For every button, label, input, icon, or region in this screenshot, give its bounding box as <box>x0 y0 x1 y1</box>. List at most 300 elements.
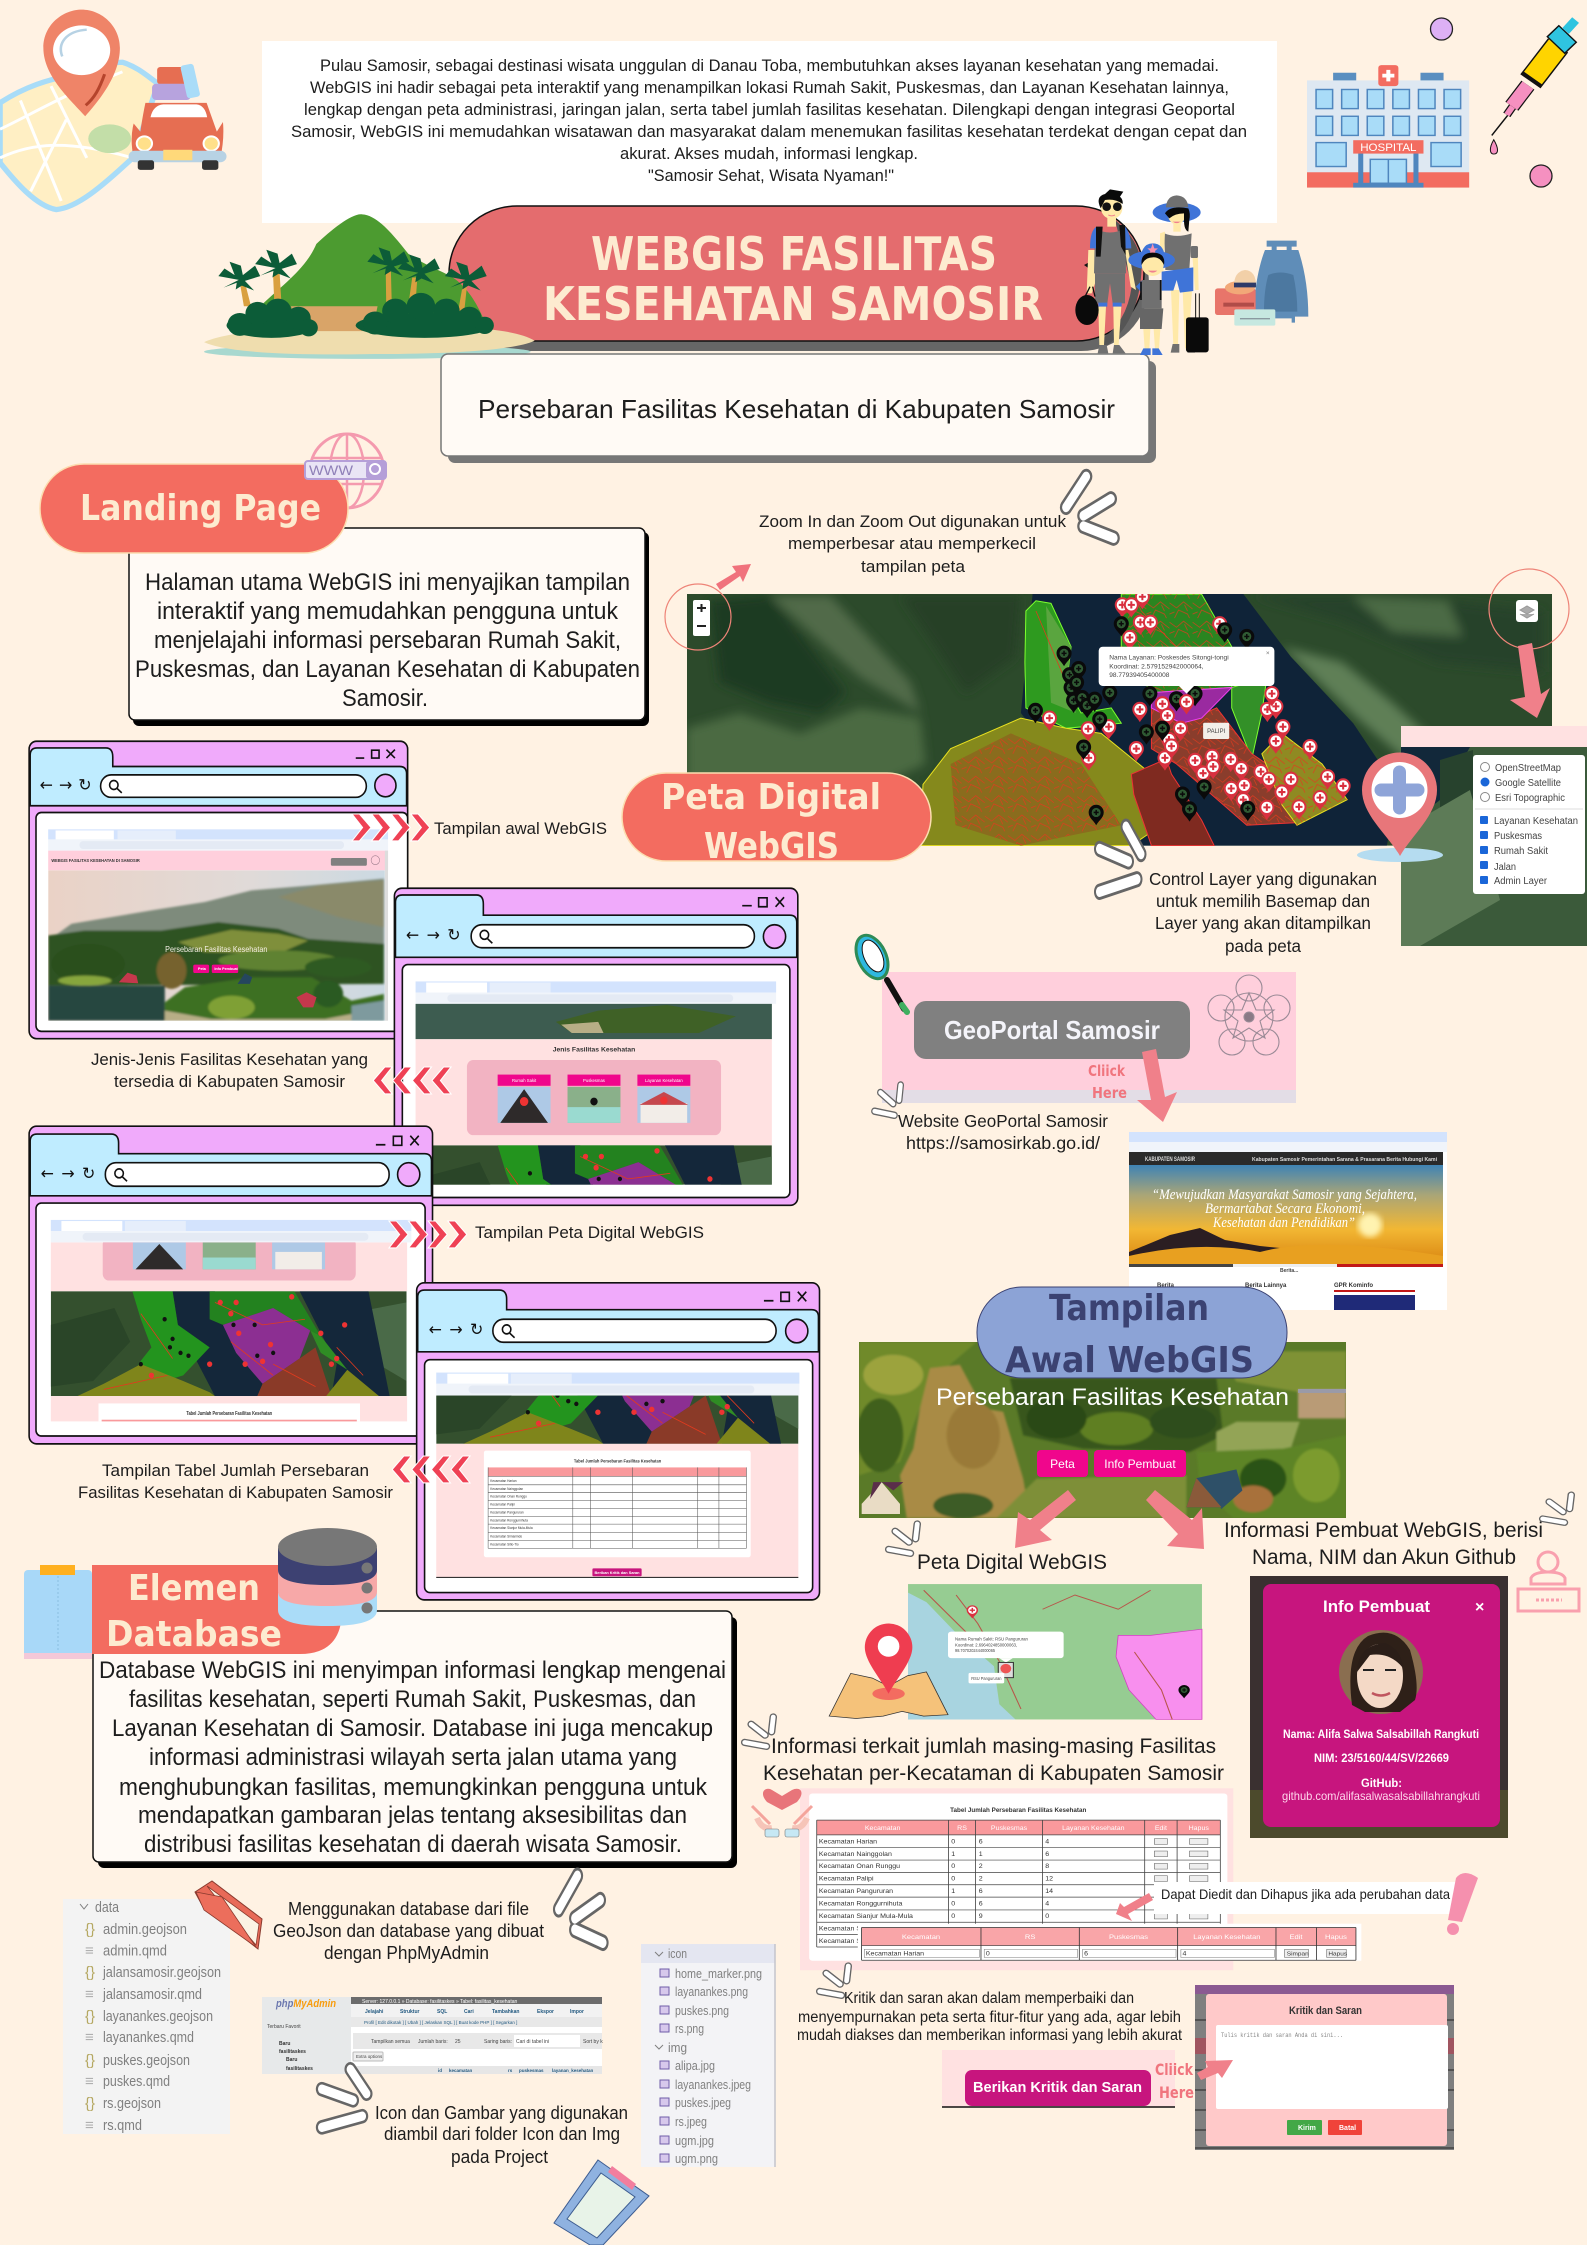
file list: icon and img folders: ugm.jpg <box>675 2133 714 2148</box>
table panel: facility count: Tabel Jumlah Persebaran Fasilitas Kesehatan <box>950 1807 1086 1814</box>
table panel: facility count: Kecamatan Nainggolan <box>819 1851 892 1858</box>
database text box <box>93 1611 737 1868</box>
browser window 4: facility table <box>417 1283 820 1600</box>
screenshot: phpMyAdmin: Impor <box>570 2009 584 2015</box>
file list: data folder: {} <box>85 2052 95 2069</box>
screenshot: phpMyAdmin: Ekspor <box>537 2009 554 2015</box>
control layer caption: untuk memilih Basemap dan <box>1156 891 1370 911</box>
browser window 4: facility table: Tabel Jumlah Persebaran Fasilitas Kesehatan <box>574 1458 662 1463</box>
file list: icon and img folders: ugm.png <box>675 2151 718 2166</box>
browser window 1: landing page: ←→↻ <box>40 775 92 795</box>
browser window 1: landing page: Persebaran Fasilitas Kesehatan <box>165 945 267 954</box>
file list: icon and img folders: rs.png <box>675 2021 704 2036</box>
icon: exclamation mark <box>1447 1873 1478 1935</box>
caption: icon and image folders <box>375 2103 628 2167</box>
file list: icon and img folders: layanankes.jpeg <box>675 2077 751 2092</box>
screenshot: phpMyAdmin: Jelajahi <box>365 2009 384 2015</box>
control layer screenshot: Jalan <box>1494 862 1516 873</box>
table panel: facility count <box>800 1788 1233 1970</box>
database text box: Layanan Kesehatan di Samosir. Database ini juga mencakup <box>112 1715 713 1742</box>
file list: data folder: ≡ <box>85 1986 94 2003</box>
caption: database source: GeoJson dan database yang dibuat <box>273 1921 544 1941</box>
heading pill: Elemen Database: Database <box>106 1614 282 1655</box>
heading pill: Peta Digital WebGIS: WebGIS <box>704 826 839 867</box>
file list: data folder: {} <box>85 1921 95 1938</box>
file list: icon and img folders: puskes.png <box>675 2003 729 2018</box>
screenshot: phpMyAdmin: Profil [ Edit dikotak ] [ Ubah ] [ Jelaskan SQL ] [ Buat kode PHP ] [ Segarkan ] <box>364 2020 517 2025</box>
table panel: facility count: Edit <box>1155 1825 1167 1832</box>
icon: hospital building: HOSPITAL <box>1360 141 1417 154</box>
heading pill: Landing Page <box>40 464 348 553</box>
icon: tropical island <box>204 214 535 359</box>
icon: emphasis strokes near kritik caption <box>820 1966 848 1995</box>
file list: data folder: {} <box>85 2095 95 2112</box>
zoom explanation text: Zoom In dan Zoom Out digunakan untuk <box>759 512 1066 531</box>
file list: data folder: jalansamosir.qmd <box>102 1986 202 2003</box>
click here label <box>1155 2060 1194 2102</box>
icon: emphasis strokes near zoom text <box>1066 476 1114 538</box>
title banner: WEBGIS FASILITAS <box>591 227 997 281</box>
intro text panel: akurat. Akses mudah, informasi lengkap. <box>620 145 918 163</box>
file list: icon and img folders: img <box>668 2040 687 2055</box>
table panel: facility count: Kecamatan Harian <box>819 1839 877 1845</box>
screenshot: phpMyAdmin: Cari di tabel ini <box>516 2039 549 2045</box>
screenshot: kabupaten samosir website: GPR Kominfo <box>1334 1283 1373 1289</box>
control layer caption: pada peta <box>1225 936 1301 956</box>
file list: data folder: admin.geojson <box>103 1921 187 1938</box>
info pembuat modal: GitHub: <box>1361 1776 1402 1790</box>
edit row table overlay <box>858 1924 1361 1961</box>
table panel: facility count: 6 <box>1045 1851 1050 1858</box>
table panel: facility count: 6 <box>979 1888 983 1895</box>
table panel: facility count: 0 <box>951 1876 956 1882</box>
caption: peta digital: Tampilan Peta Digital WebGIS <box>475 1223 704 1242</box>
screenshot: kabupaten samosir website: Berita... <box>1280 1268 1299 1274</box>
heading pill: Landing Page: Landing Page <box>80 488 321 529</box>
caption: peta digital webgis: Peta Digital WebGIS <box>917 1551 1107 1574</box>
info pembuat modal: Info Pembuat <box>1323 1597 1430 1616</box>
file list: data folder: {} <box>85 1964 95 1981</box>
chevrons: first window <box>352 814 430 841</box>
icon: emphasis strokes near control caption <box>1100 827 1141 892</box>
caption: kritik dan saran: Kritik dan saran akan dalam memperbaiki dan <box>844 1990 1134 2007</box>
browser window 4: facility table: Kecamatan Sianjur Mula-Mula <box>490 1526 533 1530</box>
browser window 1: landing page <box>29 741 408 1039</box>
screenshot: phpMyAdmin: Cari <box>464 2009 474 2015</box>
table panel: facility count: 6 <box>979 1839 983 1845</box>
caption: tabel jumlah: Fasilitas Kesehatan di Kabupaten Samosir <box>78 1483 393 1502</box>
geoportal button banner: Cliick <box>1088 1062 1126 1080</box>
decorative circle: pink <box>1530 165 1552 187</box>
icon: open folder <box>195 1881 262 1949</box>
icon: university emblem <box>1208 975 1290 1055</box>
edit row table overlay: 6 <box>1084 1951 1088 1957</box>
edit row table overlay: RS <box>1025 1933 1036 1941</box>
file list: data folder: {} <box>85 2008 95 2025</box>
arrow to geoportal site <box>1137 1049 1177 1122</box>
kritik button panel: Berikan Kritik dan Saran <box>973 2080 1142 2096</box>
edit row table overlay: Edit <box>1289 1933 1302 1941</box>
edit row table overlay: Hapus <box>1325 1933 1347 1941</box>
kritik dan saran modal: Kirim <box>1298 2125 1316 2132</box>
screenshot: kabupaten samosir website: KABUPATEN SAMOSIR <box>1145 1157 1195 1163</box>
browser window 2: facility types: Layanan Kesehatan <box>645 1078 683 1083</box>
table panel: facility count: Layanan Kesehatan <box>1062 1825 1125 1832</box>
caption: tampilan awal: Tampilan awal WebGIS <box>434 819 607 838</box>
caption: jenis fasilitas: tersedia di Kabupaten Samosir <box>114 1072 345 1091</box>
landing page text box: Puskesmas, dan Layanan Kesehatan di Kabupaten <box>135 656 640 683</box>
icon: hands holding heart <box>752 1789 812 1837</box>
kritik dan saran modal: Tulis kritik dan saran Anda di sini... <box>1221 2032 1343 2039</box>
file list: data folder: ≡ <box>85 1942 94 1960</box>
control layer caption <box>1149 869 1377 956</box>
file list: icon and img folders: home_marker.png <box>675 1966 762 1981</box>
icon: hospital building <box>1307 65 1469 188</box>
screenshot: phpMyAdmin: kecamatan <box>449 2068 473 2073</box>
screenshot: phpMyAdmin: SQL <box>437 2009 447 2015</box>
small map screenshot <box>908 1584 1202 1719</box>
table panel: facility count: 8 <box>1045 1863 1050 1870</box>
table panel: facility count: 0 <box>951 1901 956 1908</box>
control layer screenshot: Esri Topographic <box>1495 793 1565 804</box>
screenshot: kabupaten samosir website: “Mewujudkan Masyarakat Samosir yang Sejahtera, <box>1152 1187 1417 1203</box>
info pembuat modal: Nama: Alifa Salwa Salsabillah Rangkuti <box>1283 1727 1479 1741</box>
kritik dan saran modal <box>1195 1985 1454 2150</box>
callout: edit and delete <box>1154 1882 1458 1914</box>
icon: person <box>1518 1552 1579 1611</box>
file list: data folder: rs.qmd <box>103 2117 142 2134</box>
geoportal caption: Website GeoPortal Samosir <box>898 1111 1108 1131</box>
caption: jumlah fasilitas <box>763 1735 1224 1785</box>
screenshot: phpMyAdmin: phpMyAdmin <box>275 1998 336 2010</box>
icon: location pin with cross <box>1357 753 1443 862</box>
screenshot: phpMyAdmin: Terbaru Favorit <box>267 2024 301 2030</box>
landing page text box: Samosir. <box>342 685 428 712</box>
landing page preview photo: Info Pembuat <box>1104 1457 1176 1471</box>
control layer screenshot: Google Satellite <box>1495 778 1561 789</box>
browser window 1: landing page: Peta <box>198 967 207 971</box>
file list: data folder <box>63 1899 230 2134</box>
kritik dan saran modal: Batal <box>1339 2125 1356 2132</box>
control layer screenshot: Layanan Kesehatan <box>1494 816 1578 827</box>
intro text panel: WebGIS ini hadir sebagai peta interaktif yang menampilkan lokasi Rumah Sakit, Puskesmas, dan Layanan Kesehatan lainnya, <box>310 79 1229 97</box>
browser window 4: facility table: Kecamatan Sitio-Tio <box>490 1542 519 1546</box>
intro text panel <box>262 41 1277 223</box>
screenshot: phpMyAdmin: Jumlah baris: <box>418 2039 448 2045</box>
heading pill: Peta Digital WebGIS <box>622 773 931 867</box>
table panel: facility count: Puskesmas <box>991 1825 1028 1832</box>
map zoom control <box>665 584 731 650</box>
icon: www globe <box>310 434 384 508</box>
table panel: facility count: RS <box>957 1825 968 1832</box>
edit row table overlay: Simpan <box>1287 1951 1309 1957</box>
heading pill: Elemen Database <box>92 1565 342 1655</box>
info pembuat modal: NIM: 23/5160/44/SV/22669 <box>1314 1751 1449 1765</box>
file list: data folder: layanankes.qmd <box>103 2029 194 2046</box>
control layer screenshot: OpenStreetMap <box>1495 763 1561 774</box>
small map screenshot: 98.7070202444000065 <box>955 1648 995 1654</box>
file list: icon and img folders: alipa.jpg <box>675 2058 715 2073</box>
icon: emphasis strokes near database source <box>559 1876 603 1943</box>
caption: kritik dan saran: menyempurnakan peta serta fitur-fitur yang ada, agar lebih <box>798 2009 1181 2026</box>
title banner: KESEHATAN SAMOSIR <box>543 277 1043 331</box>
caption: database source <box>273 1899 544 1963</box>
intro text panel: Pulau Samosir, sebagai destinasi wisata unggulan di Danau Toba, membutuhkan akses layanan kesehatan yang memadai. <box>320 57 1219 75</box>
caption: tabel jumlah <box>78 1461 393 1502</box>
table panel: facility count: 1 <box>951 1888 956 1895</box>
table panel: facility count: Kecamatan Sianjur Mula-Mula <box>819 1913 913 1920</box>
icon: emphasis strokes near folder caption <box>322 2069 367 2127</box>
digital map panel: Nama Layanan: Poskesdes Sitongi-tongi <box>1109 654 1229 661</box>
table panel: facility count: Hapus <box>1189 1825 1210 1832</box>
screenshot: phpMyAdmin: fasilitaskes <box>286 2066 313 2072</box>
caption: tabel jumlah: Tampilan Tabel Jumlah Persebaran <box>102 1461 369 1480</box>
digital map panel: × <box>1266 650 1270 657</box>
browser window 3: digital map <box>29 1126 433 1444</box>
icon: map with red pin <box>829 1624 948 1718</box>
map layer button <box>1489 569 1569 649</box>
file list: data folder: data <box>95 1899 120 1916</box>
edit row table overlay: Hapus <box>1328 1951 1347 1957</box>
icon: luggage <box>1215 241 1308 326</box>
browser window 4: facility table: Kecamatan Onan Runggu <box>490 1495 527 1499</box>
table panel: facility count: 2 <box>979 1863 983 1870</box>
screenshot: phpMyAdmin <box>262 1997 603 2074</box>
arrow to layer control <box>1510 643 1550 718</box>
icon: www search bar <box>305 461 386 479</box>
browser window 1: landing page: WEBGIS FASILITAS KESEHATAN DI SAMOSIR <box>51 858 141 863</box>
file list: data folder: ≡ <box>85 2073 94 2090</box>
caption: informasi pembuat <box>1224 1519 1543 1569</box>
browser window 4: facility table: Kecamatan Simanindo <box>490 1534 522 1539</box>
geoportal button banner <box>882 972 1296 1103</box>
screenshot: kabupaten samosir website: Kabupaten Samosir Pemerintahan Sarana & Prasarana Berita Hubungi Kami <box>1252 1157 1438 1163</box>
control layer screenshot: Admin Layer <box>1494 876 1548 887</box>
edit row table overlay: 0 <box>986 1951 990 1957</box>
control layer caption: Layer yang akan ditampilkan <box>1155 913 1371 933</box>
table panel: facility count: 2 <box>979 1876 983 1882</box>
chevrons: third window <box>389 1221 467 1248</box>
table panel: facility count: 4 <box>1045 1901 1050 1908</box>
kritik button panel <box>942 2050 1175 2107</box>
small map screenshot: Koordinat: 2.6964024850000063, <box>955 1643 1017 1648</box>
table panel: facility count: 6 <box>979 1901 983 1908</box>
info pembuat modal <box>1250 1576 1508 1838</box>
browser window 2: facility types: Puskesmas <box>583 1078 606 1083</box>
digital map panel <box>687 589 1555 846</box>
screenshot: phpMyAdmin: rs <box>508 2068 513 2073</box>
arrow to zoom control caption <box>716 564 751 590</box>
browser window 2: facility types: ←→↻ <box>406 925 461 945</box>
caption: jumlah fasilitas: Informasi terkait jumlah masing-masing Fasilitas <box>771 1735 1216 1758</box>
table panel: facility count: Kecamatan Palipi <box>819 1876 874 1882</box>
browser window 4: facility table: Kecamatan Harian <box>490 1479 517 1483</box>
icon: emphasis strokes near geoportal caption <box>875 1085 901 1115</box>
file list: icon and img folders: layanankes.png <box>675 1984 748 1999</box>
heading pill: Peta Digital WebGIS: Peta Digital <box>661 777 881 818</box>
browser window 4: facility table: Kecamatan Pangururan <box>490 1510 524 1514</box>
info pembuat modal: github.com/alifasalwasalsabillahrangkuti <box>1282 1789 1480 1803</box>
intro text panel: Samosir, WebGIS ini memudahkan wisatawan dan masyarakat dalam menemukan fasilitas kesehatan terdekat dengan cepat dan <box>291 123 1247 141</box>
caption: icon and image folders: diambil dari folder Icon dan Img <box>384 2124 620 2144</box>
file list: data folder: puskes.geojson <box>103 2052 190 2069</box>
screenshot: kabupaten samosir website <box>1129 1132 1447 1310</box>
screenshot: phpMyAdmin: Extra options <box>356 2054 383 2059</box>
table panel: facility count: Kecamatan Ronggurnihuta <box>819 1901 903 1908</box>
chevrons: fourth window <box>392 1456 470 1483</box>
zoom explanation text <box>759 512 1066 576</box>
browser window 4: facility table: Kecamatan Nainggolan <box>490 1487 523 1491</box>
table panel: facility count: 4 <box>1045 1839 1050 1845</box>
subtitle box: Persebaran Fasilitas Kesehatan di Kabupaten Samosir <box>478 394 1115 424</box>
edit row table overlay: 4 <box>1183 1951 1187 1957</box>
arrow to table <box>1116 1893 1153 1921</box>
icon: blue notebook <box>24 1565 92 1659</box>
control layer screenshot <box>1401 726 1587 946</box>
caption: informasi pembuat: Nama, NIM dan Akun Github <box>1252 1546 1516 1569</box>
click here label: Cliick <box>1155 2060 1193 2079</box>
edit row table overlay: Puskesmas <box>1109 1933 1148 1941</box>
browser window 4: facility table: Berikan Kritik dan Saran <box>595 1571 640 1575</box>
landing page preview photo: Peta <box>1050 1457 1075 1471</box>
database text box: Database WebGIS ini menyimpan informasi lengkap mengenai <box>99 1657 726 1684</box>
table panel: facility count: 0 <box>951 1913 956 1920</box>
table panel: facility count: Kecamatan Sima <box>819 1926 873 1932</box>
edit row table overlay: Kecamatan Harian <box>866 1951 924 1957</box>
screenshot: kabupaten samosir website: Kesehatan dan Pendidikan” <box>1212 1215 1355 1231</box>
subtitle box <box>441 354 1156 463</box>
arrow to peta digital <box>1015 1490 1076 1548</box>
table panel: facility count: 0 <box>951 1839 956 1845</box>
caption: jenis fasilitas <box>91 1050 368 1091</box>
icon: tourist family <box>1075 189 1209 355</box>
file list: data folder: jalansamosir.geojson <box>102 1964 221 1981</box>
file list: data folder: layanankes.geojson <box>103 2008 213 2025</box>
table panel: facility count: 12 <box>1045 1876 1053 1882</box>
digital map panel: Koordinat: 2.579152942000064, <box>1109 664 1204 671</box>
database text box: distribusi fasilitas kesehatan di daerah wisata Samosir. <box>144 1831 682 1858</box>
table panel: facility count: Kecamatan <box>865 1825 901 1832</box>
geoportal button banner: Here <box>1092 1084 1127 1102</box>
edit row table overlay: Layanan Kesehatan <box>1193 1933 1260 1941</box>
landing page text box: Halaman utama WebGIS ini menyajikan tampilan <box>145 569 630 596</box>
screenshot: phpMyAdmin: Baru <box>279 2041 290 2047</box>
caption: icon and image folders: pada Project <box>451 2147 548 2167</box>
browser window 1: landing page: Info Pembuat <box>214 967 238 971</box>
browser window 3: digital map: Tabel Jumlah Persebaran Fasilitas Kesehatan <box>186 1411 272 1417</box>
file list: data folder: puskes.qmd <box>103 2073 170 2090</box>
caption: kritik dan saran: mudah diakses dan memberikan informasi yang lebih akurat <box>797 2027 1183 2044</box>
file list: icon and img folders: puskes.jpeg <box>675 2095 731 2110</box>
icon: clipboard <box>554 2160 649 2245</box>
click here label: Here <box>1159 2083 1194 2102</box>
browser window 3: digital map: ←→↻ <box>41 1164 95 1183</box>
database text box: menghubungkan fasilitas, memungkinkan pengguna untuk <box>119 1774 708 1801</box>
icon: map with pin and car <box>0 10 227 210</box>
screenshot: phpMyAdmin: Struktur <box>400 2009 420 2015</box>
file list: icon and img folders: rs.jpeg <box>675 2114 707 2129</box>
kritik dan saran modal: Kritik dan Saran <box>1289 2005 1362 2017</box>
heading pill: Tampilan Awal WebGIS: Awal WebGIS <box>1005 1340 1254 1381</box>
icon: database cylinder <box>278 1528 377 1626</box>
screenshot: phpMyAdmin: Sort by k <box>583 2039 603 2045</box>
screenshot: phpMyAdmin: 25 <box>455 2039 461 2045</box>
screenshot: phpMyAdmin: Tampilkan semua <box>371 2039 410 2045</box>
icon: magnifying glass <box>850 930 907 1012</box>
file list: icon and img folders: icon <box>668 1946 687 1961</box>
landing page text box: menjelajahi informasi persebaran Rumah Sakit, <box>154 627 621 654</box>
digital map panel: PALIPI <box>1207 728 1225 735</box>
zoom explanation text: memperbesar atau memperkecil <box>788 534 1036 553</box>
table panel: facility count: Kecamatan Pangururan <box>819 1888 893 1895</box>
browser window 2: facility types: Jenis Fasilitas Kesehatan <box>553 1046 635 1054</box>
heading pill: Tampilan Awal WebGIS: Tampilan <box>1049 1288 1209 1329</box>
landing page text box: interaktif yang memudahkan pengguna untuk <box>157 598 619 625</box>
database text box: fasilitas kesehatan, seperti Rumah Sakit, Puskesmas, dan <box>129 1686 696 1713</box>
screenshot: phpMyAdmin: fasilitaskes <box>279 2049 306 2055</box>
decorative circle: purple <box>1430 18 1452 40</box>
icon: emphasis strokes near peta digital caption <box>889 1524 917 1553</box>
caption: database source: Menggunakan database dari file <box>288 1899 529 1919</box>
geoportal caption <box>898 1111 1108 1153</box>
screenshot: phpMyAdmin: Server: 127.0.0.1 » Database: fasilitaskes » Tabel: fasilitas_kesehatan <box>362 1999 517 2005</box>
browser window 2: facility types <box>394 888 798 1250</box>
chevrons: second window <box>373 1067 451 1094</box>
caption: jenis fasilitas: Jenis-Jenis Fasilitas Kesehatan yang <box>91 1050 368 1069</box>
control layer caption: Control Layer yang digunakan <box>1149 869 1377 889</box>
browser window 4: facility table: Kecamatan Palipi <box>490 1502 515 1507</box>
heading pill: Elemen Database: Elemen <box>128 1568 260 1609</box>
screenshot: phpMyAdmin: id <box>438 2068 442 2073</box>
control layer screenshot: Rumah Sakit <box>1494 846 1548 857</box>
landing page preview photo: Persebaran Fasilitas Kesehatan <box>936 1384 1289 1411</box>
zoom explanation text: tampilan peta <box>861 557 966 576</box>
arrow to modal <box>1197 2060 1233 2080</box>
intro text panel: "Samosir Sehat, Wisata Nyaman!" <box>648 167 894 185</box>
screenshot: kabupaten samosir website: Berita Lainnya <box>1245 1283 1287 1289</box>
intro text panel: lengkap dengan peta administrasi, jaringan jalan, serta tabel jumlah fasilitas kesehatan. Dilengkapi dengan integrasi Geoportal <box>304 101 1235 119</box>
icon: emphasis strokes near informasi pembuat <box>1543 1495 1571 1523</box>
geoportal button banner: GeoPortal Samosir <box>944 1015 1160 1045</box>
caption: jumlah fasilitas: Kesehatan per-Kecataman di Kabupaten Samosir <box>763 1762 1224 1785</box>
file list: data folder: ≡ <box>85 2029 94 2046</box>
heading pill: Tampilan Awal WebGIS <box>977 1287 1287 1381</box>
browser window 2: facility types: Rumah Sakit <box>512 1078 537 1083</box>
small map screenshot: RSU Pangururan <box>971 1676 1002 1682</box>
table panel: facility count: 9 <box>979 1913 983 1920</box>
file list: data folder: rs.geojson <box>103 2095 161 2112</box>
icon: www search bar: WWW <box>309 462 354 478</box>
icon: emphasis strokes near jumlah fasilitas caption <box>745 1717 773 1746</box>
file list: data folder: admin.qmd <box>103 1942 167 1960</box>
geoportal caption: https://samosirkab.go.id/ <box>906 1133 1100 1153</box>
caption: icon and image folders: Icon dan Gambar yang digunakan <box>375 2103 628 2123</box>
arrow to info pembuat <box>1146 1490 1204 1549</box>
file list: data folder: ≡ <box>85 2117 94 2134</box>
caption: kritik dan saran <box>797 1990 1183 2044</box>
title banner <box>449 206 1149 351</box>
landing page text box <box>129 528 649 726</box>
control layer screenshot: Puskesmas <box>1494 831 1542 842</box>
digital map panel: 98.77939405400008 <box>1109 672 1170 679</box>
table panel: facility count: 0 <box>951 1863 956 1870</box>
small map screenshot: Nama Rumah Sakit: RSU Pangururan <box>955 1637 1028 1642</box>
landing page preview photo <box>857 1342 1346 1518</box>
screenshot: phpMyAdmin: layanan_kesehatan <box>552 2068 594 2073</box>
table panel: facility count: 1 <box>951 1851 956 1858</box>
info pembuat modal: × <box>1475 1599 1484 1616</box>
table panel: facility count: 14 <box>1045 1888 1053 1895</box>
